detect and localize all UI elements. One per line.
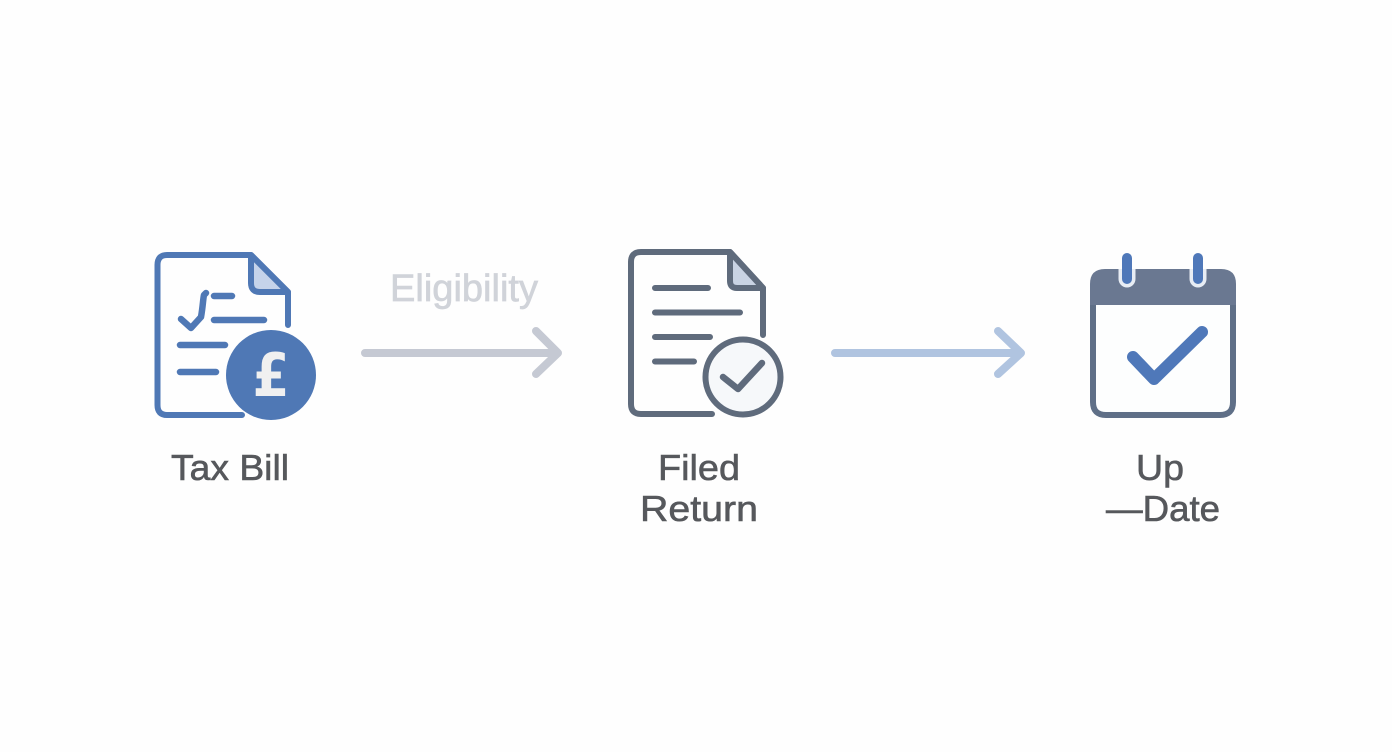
arrow: gray [365, 331, 558, 374]
label: Filed Return: Filed [658, 447, 740, 488]
label: Eligibility: Eligibility [390, 268, 538, 310]
label: Filed Return [640, 447, 758, 529]
icon: tax bill document with pound coin [158, 255, 316, 420]
label: Tax Bill: Tax Bill [171, 447, 289, 488]
label: Up-Date: Up [1136, 447, 1184, 488]
icon: calendar with check [1090, 258, 1236, 415]
arrow: blue [835, 331, 1021, 374]
label: Filed Return: Return [640, 488, 758, 529]
icon: tax bill document with pound coin: £ [252, 341, 290, 411]
label: Up-Date [1106, 447, 1220, 529]
icon: filed return document with check [631, 252, 780, 414]
label: Up-Date: —Date [1106, 488, 1220, 529]
